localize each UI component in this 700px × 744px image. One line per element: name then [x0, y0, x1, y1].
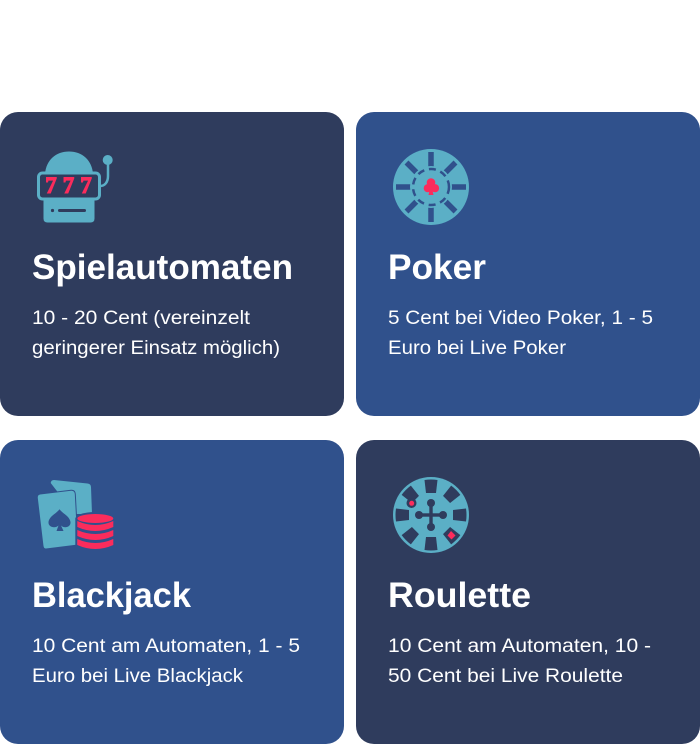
icon: roulette wheel [393, 477, 469, 553]
heading: Roulette [388, 576, 531, 615]
text block [32, 308, 280, 359]
panel: Blackjack [0, 440, 344, 744]
icon: slot machine [38, 152, 113, 222]
icon: poker chip [393, 149, 469, 225]
panel: Roulette [356, 440, 700, 744]
text block [32, 636, 300, 687]
text block: 10 Cent am Automaten, 10 - [388, 636, 651, 657]
panel: Poker [356, 112, 700, 416]
text block: 50 Cent bei Live Roulette [388, 666, 623, 687]
panel: Spielautomaten [0, 112, 344, 416]
heading: Poker [388, 248, 486, 287]
icon: slot machine: 7 [63, 173, 74, 198]
text block: 10 Cent am Automaten, 1 - 5 [32, 636, 300, 657]
text block: Euro bei Live Poker [388, 338, 567, 359]
text block: Euro bei Live Blackjack [32, 666, 244, 687]
heading: Spielautomaten [32, 248, 293, 287]
text block: geringerer Einsatz möglich) [32, 338, 280, 359]
icon: slot machine: 7 [80, 173, 92, 198]
heading: Blackjack [32, 576, 192, 615]
icon: slot machine: 7 [45, 173, 57, 198]
text block [388, 308, 653, 359]
icon: cards and chips [37, 480, 115, 549]
text block [388, 636, 651, 687]
text block: 5 Cent bei Video Poker, 1 - 5 [388, 308, 653, 329]
text block: 10 - 20 Cent (vereinzelt [32, 308, 251, 329]
